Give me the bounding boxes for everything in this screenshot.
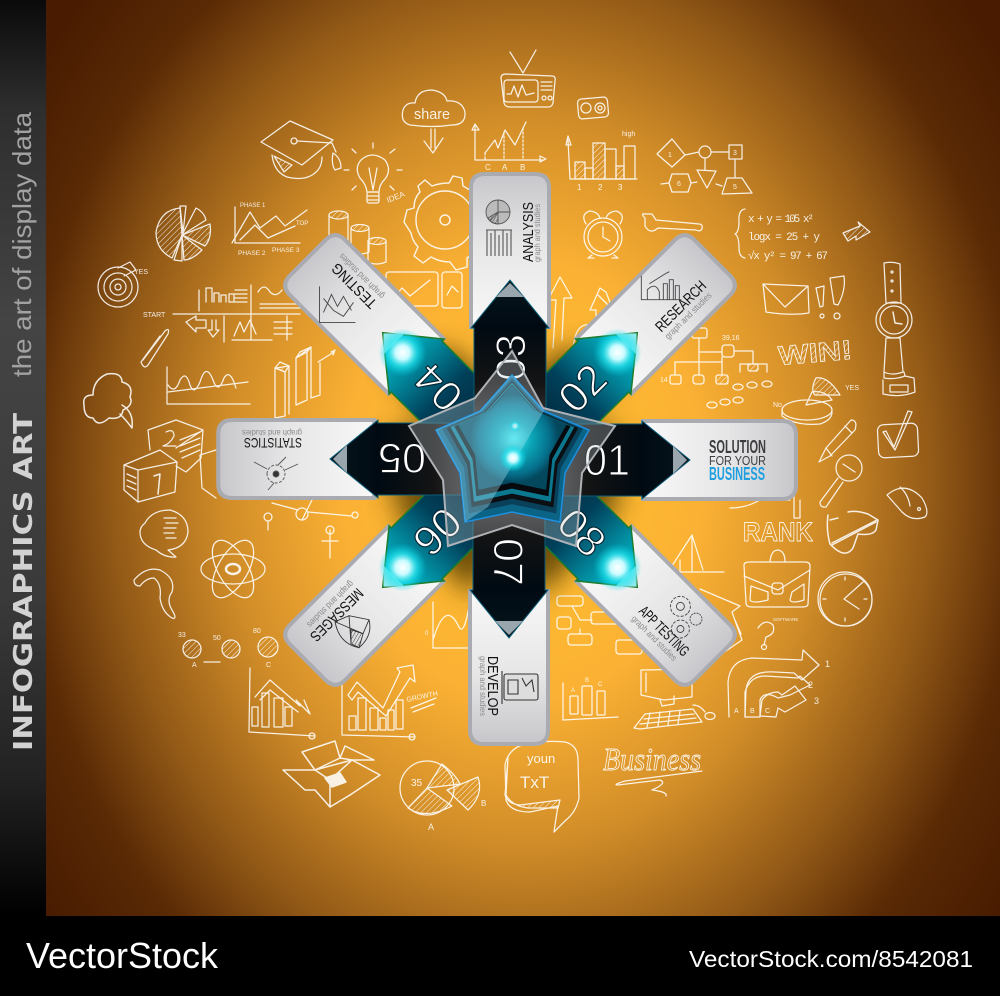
doodle: tablet and phone bbox=[386, 272, 462, 308]
doodle: bar chart abc: B bbox=[585, 678, 589, 684]
highlight triangle bbox=[373, 323, 405, 355]
doodle: flow chart: 5 bbox=[733, 184, 737, 191]
center star emblem bbox=[409, 351, 615, 546]
doodle: line chart abc bbox=[472, 122, 546, 172]
doodle: small pies: 80 bbox=[253, 628, 261, 635]
icon: growth bars bbox=[641, 272, 681, 300]
doodle sketches bbox=[84, 50, 927, 832]
doodle: question mark bbox=[758, 617, 798, 650]
heading: SOLUTION bbox=[709, 437, 766, 457]
label: MESSAGES bbox=[306, 584, 366, 645]
doodle: speech list bbox=[140, 510, 188, 557]
doodle: start flow board bbox=[143, 285, 300, 342]
label: RESEARCH bbox=[652, 278, 710, 336]
doodle: exclamation marks bbox=[816, 276, 844, 319]
doodle: nested arrows: B bbox=[750, 708, 755, 715]
subheading: FOR YOUR bbox=[709, 454, 766, 468]
doodle: bar chart abc: A bbox=[571, 688, 575, 694]
tip triangle bbox=[333, 445, 347, 473]
doodle: briefcase bbox=[744, 550, 810, 607]
doodle: node network bbox=[264, 500, 358, 558]
card: 01 solution bbox=[510, 421, 796, 499]
doodle: equations: logx = 25 + y bbox=[748, 232, 820, 244]
doodle: triangle chart bbox=[658, 535, 724, 572]
doodle: target bbox=[98, 262, 148, 307]
doodle: phase chart: PHASE 3 bbox=[272, 247, 300, 254]
doodle: small pies: C bbox=[266, 662, 271, 669]
footer brand left: VectorStock bbox=[26, 935, 219, 976]
doodle: org chart bbox=[660, 328, 772, 408]
glow bbox=[584, 534, 651, 601]
doodle: bar chart: 3 bbox=[618, 183, 623, 192]
doodle: mouse bbox=[887, 487, 927, 519]
doodle: bar chart abc: C bbox=[598, 682, 603, 688]
doodle: hatched pie bbox=[156, 206, 210, 261]
doodle: wrist watch bbox=[876, 262, 915, 396]
doodle: bar chart: high bbox=[622, 131, 635, 138]
doodle: flow chart: 6 bbox=[677, 181, 681, 188]
doodle: org chart: 39,16 bbox=[722, 335, 740, 342]
doodle: growth chart: GROWTH bbox=[406, 690, 439, 704]
sublabel: graph and studies bbox=[663, 290, 714, 341]
doodle: phase chart: PHASE 1 bbox=[240, 203, 266, 209]
sublabel: graph and studies bbox=[478, 656, 487, 716]
doodle: question mark: SOFTWARE bbox=[773, 617, 798, 622]
glow bbox=[369, 534, 436, 601]
doodle: start flow board: START bbox=[143, 312, 166, 319]
label: ANALYSIS bbox=[520, 202, 537, 262]
glow bbox=[369, 319, 436, 386]
doodle: falling bar chart bbox=[249, 668, 315, 739]
icon: pie bbox=[486, 200, 510, 224]
footer url right: VectorStock.com/8542081 bbox=[689, 946, 973, 972]
doodle: org chart: 14 bbox=[660, 377, 668, 384]
doodle: pie abc bbox=[400, 761, 486, 832]
doodle: rounded shapes behind cards bbox=[300, 476, 800, 630]
icon: gears bbox=[656, 592, 706, 642]
doodle: line chart abc: A bbox=[502, 163, 508, 172]
number 08: 08 bbox=[548, 499, 615, 566]
soft shadow under the star burst bbox=[381, 351, 631, 596]
tagline: the art of display data bbox=[7, 111, 37, 377]
sublabel: graph and studies bbox=[305, 579, 356, 630]
number 05: 05 bbox=[378, 435, 426, 482]
doodle: tv bbox=[501, 50, 555, 107]
number 02: 02 bbox=[549, 355, 616, 422]
doodle: coin pie yes no: YES bbox=[845, 385, 859, 392]
doodle: analog clock bbox=[818, 572, 872, 626]
doodle: small arrow bbox=[843, 222, 870, 241]
doodle: small pies: 50 bbox=[213, 635, 221, 642]
doodle: coins bbox=[329, 211, 386, 264]
doodle: pencil bbox=[819, 420, 856, 462]
sublabel: graph and studies bbox=[630, 613, 679, 663]
doodle: nested arrows: 2 bbox=[808, 680, 813, 690]
doodle: phase chart: TOP bbox=[296, 221, 308, 227]
blue star layers bbox=[436, 375, 589, 522]
sublabel: graph and studies bbox=[533, 204, 542, 262]
doodle: small pies: A bbox=[192, 662, 197, 669]
doodle: curve plot: 0 bbox=[425, 631, 429, 637]
doodle: light bulb: IDEA bbox=[385, 189, 407, 205]
doodle: equations: x + y = 105 x² bbox=[748, 214, 814, 226]
label: APP TESTING bbox=[635, 603, 692, 660]
doodle: nested arrows: A bbox=[734, 708, 739, 715]
icon: barcode chart bbox=[486, 230, 512, 256]
number 04: 04 bbox=[405, 354, 472, 421]
icon: zigzag chart bbox=[319, 286, 355, 322]
label: DEVELOP bbox=[484, 656, 501, 716]
doodle: bar chart: 2 bbox=[598, 183, 603, 192]
doodle: question squiggle bbox=[134, 569, 175, 618]
highlight triangle bbox=[615, 565, 647, 597]
glass highlight bbox=[436, 375, 544, 522]
doodle: business lettering: Business bbox=[603, 741, 701, 777]
card: 05 statistics bbox=[218, 420, 510, 498]
tip triangle bbox=[496, 283, 524, 297]
doodle: phase chart: PHASE 2 bbox=[238, 250, 266, 257]
icon: gear diagram bbox=[254, 457, 298, 490]
doodle: nested arrows: 1 bbox=[825, 659, 830, 669]
doodle: your txt speech bubble bbox=[505, 741, 579, 832]
doodle: isometric bars bbox=[275, 347, 335, 418]
label: STATISTICS bbox=[244, 435, 302, 451]
doodle: business lettering bbox=[603, 741, 702, 796]
doodle: your txt speech bubble: TxT bbox=[520, 773, 549, 792]
glow bbox=[584, 319, 651, 386]
label: TESTING bbox=[328, 259, 381, 312]
doodle: cloud labels bbox=[557, 596, 642, 654]
doodle: light bulb bbox=[344, 143, 407, 205]
doodle: open box bbox=[283, 741, 380, 807]
doodle: up arrows bbox=[548, 277, 612, 350]
doodle: bar chart abc bbox=[563, 678, 618, 720]
icon: faceted shield bbox=[335, 616, 370, 648]
card: 04 testing bbox=[280, 230, 538, 488]
doodle: line chart abc: C bbox=[485, 163, 491, 172]
business word: BUSINESS bbox=[709, 464, 765, 484]
number 06: 06 bbox=[404, 498, 471, 565]
number 03: 03 bbox=[487, 334, 534, 381]
doodle: flow chart bbox=[657, 139, 752, 194]
doodle: stacked papers bbox=[700, 589, 742, 655]
doodle: checkbox bbox=[877, 411, 919, 458]
card: 08 app testing bbox=[482, 432, 740, 690]
doodle: small pies: 33 bbox=[178, 632, 186, 639]
doodle: coin pie yes no bbox=[773, 378, 859, 424]
doodle: number cubes bbox=[124, 420, 216, 502]
number 01: 01 bbox=[584, 436, 630, 485]
doodle: glasses bbox=[827, 511, 878, 553]
doodle: bar chart: 1 bbox=[577, 183, 582, 192]
highlight triangle bbox=[615, 323, 647, 355]
doodle: magnifier bbox=[820, 455, 862, 507]
doodle: pie abc: 35 bbox=[411, 778, 423, 789]
doodle: flow chart: 3 bbox=[733, 150, 737, 157]
sublabel: graph and studies bbox=[242, 428, 302, 437]
doodle: bar chart bbox=[566, 131, 637, 192]
doodle: growth chart bbox=[342, 665, 439, 740]
doodle: graduation cap bbox=[261, 121, 341, 178]
doodle: share cloud bbox=[402, 90, 465, 153]
sublabel: graph and studies bbox=[336, 251, 386, 301]
doodle: wrench bbox=[642, 214, 702, 231]
left sidebar panel bbox=[0, 0, 46, 916]
translucent outer pentagon bbox=[409, 351, 615, 546]
doodle: small pies bbox=[178, 628, 278, 669]
tip triangle bbox=[673, 446, 687, 474]
doodle: pie abc: A bbox=[428, 822, 434, 832]
card: 06 messages bbox=[280, 432, 538, 690]
doodle: equations: √x y² = 97 + 67 bbox=[748, 250, 828, 263]
doodle: pie abc: B bbox=[481, 799, 486, 808]
sidebar title: INFOGRAPHICS ART bbox=[9, 413, 39, 751]
doodle: alarm clock bbox=[584, 211, 622, 258]
doodle: line chart abc: B bbox=[520, 163, 525, 172]
doodle: rank lettering: RANK bbox=[743, 517, 813, 547]
doodle: squiggle chart bbox=[167, 367, 250, 404]
highlight triangle bbox=[373, 565, 405, 597]
card: 02 research bbox=[482, 229, 740, 488]
doodle: nested arrows bbox=[728, 650, 830, 717]
doodle: phase chart bbox=[232, 203, 308, 257]
doodle: cloud tree bbox=[84, 374, 132, 428]
doodle: target: YES bbox=[134, 269, 148, 276]
doodle: flow chart: 1 bbox=[668, 152, 672, 159]
doodle: your txt speech bubble: youn bbox=[527, 751, 555, 766]
icon: blueprint board bbox=[502, 671, 538, 704]
doodle: win lettering: WIN! bbox=[777, 335, 853, 371]
doodle: atom bbox=[201, 534, 265, 604]
center glow bbox=[499, 444, 527, 472]
doodle: curve plot bbox=[425, 600, 470, 648]
doodle: big gear bbox=[404, 176, 480, 270]
card: 03 analysis bbox=[471, 174, 549, 460]
doodle: envelope bbox=[763, 284, 809, 314]
doodle: paperclip bbox=[141, 330, 169, 367]
doodle: computer and keyboard bbox=[634, 669, 715, 729]
left sidebar text bbox=[7, 111, 39, 751]
doodle: equations bbox=[735, 209, 828, 263]
card: 07 develop bbox=[470, 458, 548, 744]
doodle: nested arrows: 3 bbox=[814, 696, 819, 706]
doodle: coin pie yes no: No bbox=[773, 402, 782, 409]
doodle: nested arrows: C bbox=[765, 708, 770, 715]
number 07: 07 bbox=[485, 538, 532, 586]
tip triangle bbox=[495, 621, 523, 635]
doodle: go badge bbox=[577, 97, 609, 119]
doodle: share cloud: share bbox=[414, 106, 450, 123]
